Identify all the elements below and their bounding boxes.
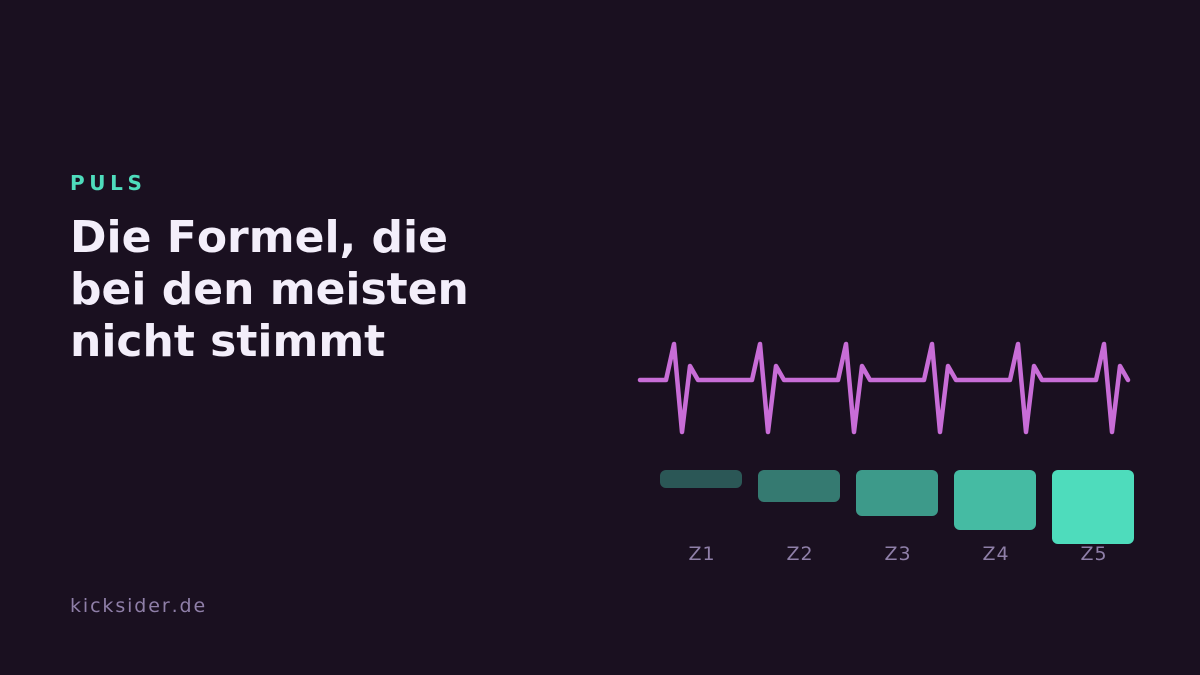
zone bar Z3 [856, 470, 938, 516]
title: nicht stimmt [70, 316, 385, 367]
eyebrow: PULS: PULS [70, 171, 146, 195]
zone bar Z5 [1052, 470, 1134, 544]
zone label Z5: Z5 [1080, 543, 1108, 565]
title: bei den meisten [70, 264, 469, 315]
zone label Z4: Z4 [982, 543, 1010, 565]
title: Die Formel, die [70, 212, 448, 263]
zone bar Z4 [954, 470, 1036, 530]
zone bar Z1 [660, 470, 742, 488]
zone label Z3: Z3 [884, 543, 912, 565]
title [70, 212, 469, 367]
zone label Z1: Z1 [688, 543, 716, 565]
zone bar Z2 [758, 470, 840, 502]
footer source: kicksider.de [70, 595, 207, 617]
zone label Z2: Z2 [786, 543, 814, 565]
